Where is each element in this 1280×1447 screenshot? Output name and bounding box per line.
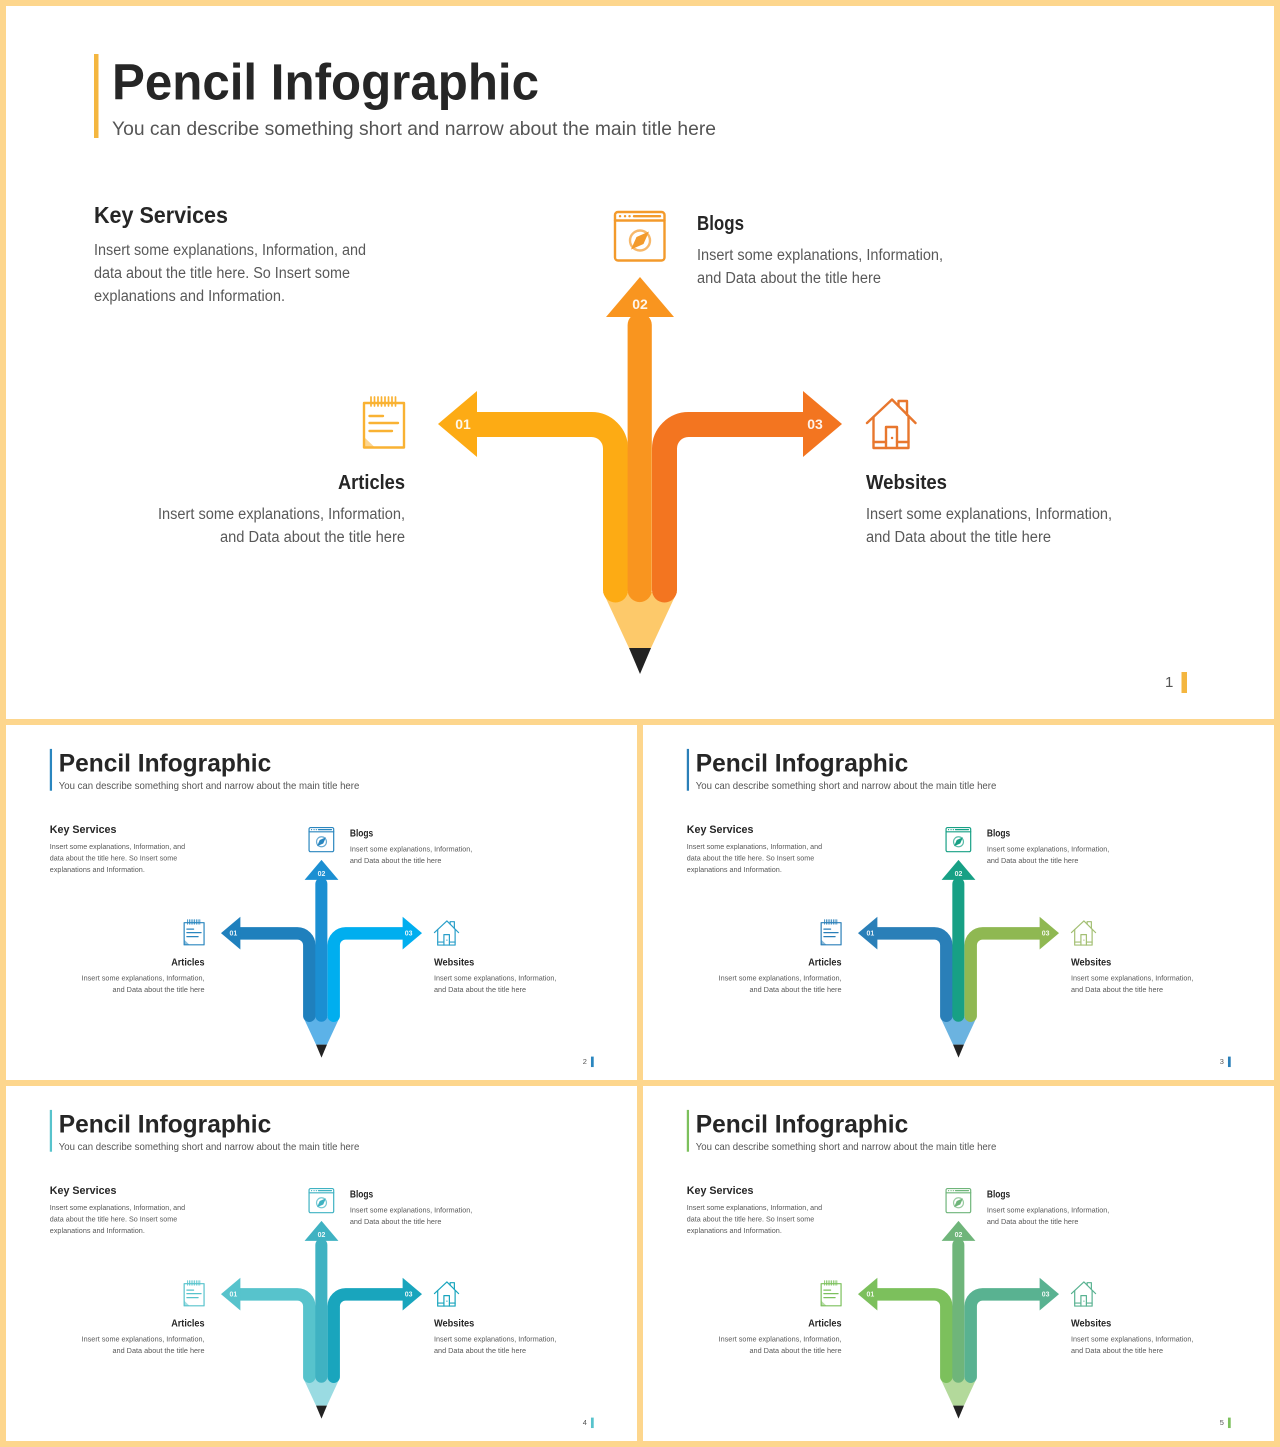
icon: blog browser [309,828,334,852]
text block: blogs: Insert some explanations, Information, [987,844,1109,853]
text block: articles [719,1318,842,1355]
arrow 02 up [942,1221,975,1377]
arrow 01 left: 01 [455,416,471,432]
text block: articles: Insert some explanations, Information, [82,973,205,982]
icon: website house [1071,921,1096,945]
text block: articles: Articles [808,1318,842,1329]
text block: articles: and Data about the title here [112,1346,205,1355]
text block: key services [687,1185,822,1235]
text block: websites [434,1318,556,1355]
text block: articles: and Data about the title here [749,1346,842,1355]
arrow 02 up [305,1221,338,1377]
text block: websites: and Data about the title here [434,1346,526,1355]
subtitle: You can describe something short and narrow about the main title here [696,1142,996,1153]
icon: articles notepad [184,1281,204,1306]
panel: green slide [643,1086,1274,1441]
text block: key services: Insert some explanations, Information, and [94,242,366,259]
text block: articles: Articles [171,957,205,968]
arrow 03 right: 03 [807,416,823,432]
arrow 01 left: 01 [867,931,874,938]
icon: website house [1071,1282,1096,1306]
text block: articles: Insert some explanations, Information, [82,1334,205,1343]
arrow 03 right [971,917,1059,1016]
title: Pencil Infographic [59,1111,271,1139]
arrow 02 up [606,277,674,590]
pencil with three arrows [858,860,1059,1058]
icon: articles notepad [821,1281,841,1306]
arrow 01 left [221,917,309,1016]
panel: blue slide [6,725,637,1080]
page number: 4 [583,1418,587,1427]
page number [1220,1418,1231,1428]
text block: websites [866,471,1112,546]
text block: key services [94,202,366,305]
text block: key services: Insert some explanations, Information, and [687,1203,822,1212]
text block: blogs [987,1190,1109,1226]
pencil with three arrows [221,860,422,1058]
pencil lead [629,648,651,674]
text block: articles [158,471,405,546]
pencil with three arrows [221,1221,422,1419]
icon: articles notepad [364,397,404,448]
text block: articles: Insert some explanations, Information, [158,506,405,523]
page number: 5 [1220,1418,1224,1427]
title accent bar [687,1110,689,1152]
arrow 02 up: 02 [318,871,325,878]
text block: key services: data about the title here. So Insert some [687,853,814,862]
panel: main orange slide [6,6,1274,719]
icon: blog browser [309,1189,334,1213]
subtitle: You can describe something short and narrow about the main title here [112,118,716,140]
arrow 03 right [334,917,422,1016]
text block: blogs: and Data about the title here [987,1217,1078,1226]
text block: articles: and Data about the title here [749,985,842,994]
arrow 02 up [305,860,338,1016]
page number: 3 [1220,1057,1224,1066]
arrow 03 right: 03 [405,931,413,938]
icon: blog browser [946,1189,971,1213]
icon: articles notepad [184,920,204,945]
title: Pencil Infographic [696,1111,908,1139]
text block: articles: Insert some explanations, Information, [719,1334,842,1343]
arrow 02 up: 02 [955,871,962,878]
pencil wood [303,1378,340,1406]
text block: blogs: Insert some explanations, Information, [350,844,472,853]
title: Pencil Infographic [59,750,271,778]
text block: websites: Insert some explanations, Information, [434,1334,556,1343]
text block: websites: Insert some explanations, Information, [1071,1334,1193,1343]
arrow 02 up: 02 [318,1232,325,1239]
icon: articles notepad [821,920,841,945]
text block: articles: and Data about the title here [112,985,205,994]
title: Pencil Infographic [112,54,539,110]
page number [583,1418,594,1428]
text block: key services: explanations and Information. [687,1226,782,1235]
text block: websites: Websites [434,957,475,968]
subtitle: You can describe something short and narrow about the main title here [59,781,359,792]
text block: websites: and Data about the title here [1071,1346,1163,1355]
arrow 03 right [971,1278,1059,1377]
text block: key services: data about the title here. So Insert some [50,853,177,862]
text block: key services: Insert some explanations, Information, and [50,1203,185,1212]
arrow 01 left [438,391,616,590]
text block: key services [50,1185,185,1235]
title accent bar [94,54,98,138]
page number [1165,672,1187,693]
text block: blogs: Blogs [350,829,374,840]
icon: website house [434,921,459,945]
pencil wood [303,1017,340,1045]
text block: blogs: Insert some explanations, Information, [987,1205,1109,1214]
text block: websites [1071,957,1193,994]
text block: key services: Insert some explanations, Information, and [687,842,822,851]
text block: websites: and Data about the title here [1071,985,1163,994]
text block: articles: Articles [808,957,842,968]
text block: blogs: Blogs [987,829,1011,840]
pencil with three arrows [858,1221,1059,1419]
text block: key services: Key Services [687,1185,753,1197]
text block: key services: explanations and Information. [687,865,782,874]
pencil wood [940,1017,977,1045]
arrow 03 right: 03 [1042,931,1050,938]
icon: website house [434,1282,459,1306]
text block: blogs: Insert some explanations, Information, [697,247,943,264]
text block: blogs: Insert some explanations, Information, [350,1205,472,1214]
text block: articles: and Data about the title here [220,529,405,546]
text block: key services: explanations and Information. [94,288,285,305]
text block: websites: Insert some explanations, Information, [1071,973,1193,982]
pencil lead [316,1406,327,1419]
page number [1220,1057,1231,1067]
title accent bar [687,749,689,791]
pencil with three arrows [438,277,842,674]
pencil wood [603,592,677,648]
text block: articles: Articles [171,1318,205,1329]
panel: teal slide [6,1086,637,1441]
text block: websites: Insert some explanations, Information, [434,973,556,982]
text block: websites: Insert some explanations, Information, [866,506,1112,523]
text block: articles [82,1318,205,1355]
text block: websites: and Data about the title here [434,985,526,994]
text block: key services: Key Services [50,1185,116,1197]
text block: blogs [697,212,943,287]
arrow 02 up [942,860,975,1016]
text block: websites [1071,1318,1193,1355]
subtitle: You can describe something short and narrow about the main title here [59,1142,359,1153]
text block: key services: data about the title here. So Insert some [687,1214,814,1223]
arrow 01 left: 01 [867,1292,874,1299]
text block: key services [50,824,185,874]
text block: key services: Key Services [94,202,228,228]
title accent bar [50,1110,52,1152]
icon: website house [867,400,916,448]
text block: websites: Websites [1071,1318,1112,1329]
text block: key services: data about the title here. So Insert some [94,265,350,282]
text block: key services [687,824,822,874]
text block: blogs: Blogs [350,1190,374,1201]
text block: blogs: and Data about the title here [350,1217,441,1226]
pencil wood [940,1378,977,1406]
text block: blogs: Blogs [697,212,744,235]
text block: articles: Insert some explanations, Information, [719,973,842,982]
text block: blogs [350,1190,472,1226]
panel: blue-green slide [643,725,1274,1080]
arrow 03 right: 03 [405,1292,413,1299]
text block: blogs: and Data about the title here [350,856,441,865]
text block: blogs [350,829,472,865]
text block: blogs: and Data about the title here [987,856,1078,865]
page number: 1 [1165,674,1173,691]
arrow 02 up: 02 [632,296,648,312]
pencil lead [316,1045,327,1058]
text block: websites: Websites [866,471,947,494]
pencil lead [953,1045,964,1058]
title accent bar [50,749,52,791]
text block: websites [434,957,556,994]
text block: blogs [987,829,1109,865]
pencil lead [953,1406,964,1419]
text block: blogs: Blogs [987,1190,1011,1201]
text block: key services: Key Services [687,824,753,836]
arrow 03 right [334,1278,422,1377]
arrow 03 right [664,391,842,590]
text block: key services: explanations and Information. [50,865,145,874]
arrow 01 left [858,1278,946,1377]
text block: websites: Websites [1071,957,1112,968]
text block: websites: Websites [434,1318,475,1329]
text block: key services: data about the title here. So Insert some [50,1214,177,1223]
text block: articles [82,957,205,994]
icon: blog browser [615,212,664,260]
arrow 01 left [858,917,946,1016]
arrow 03 right: 03 [1042,1292,1050,1299]
page number: 2 [583,1057,587,1066]
icon: blog browser [946,828,971,852]
text block: key services: explanations and Information. [50,1226,145,1235]
arrow 01 left: 01 [230,1292,237,1299]
text block: articles [719,957,842,994]
text block: key services: Insert some explanations, Information, and [50,842,185,851]
text block: key services: Key Services [50,824,116,836]
arrow 01 left [221,1278,309,1377]
title: Pencil Infographic [696,750,908,778]
text block: websites: and Data about the title here [866,529,1051,546]
text block: blogs: and Data about the title here [697,270,881,287]
page number [583,1057,594,1067]
text block: articles: Articles [338,471,405,494]
arrow 02 up: 02 [955,1232,962,1239]
arrow 01 left: 01 [230,931,237,938]
subtitle: You can describe something short and narrow about the main title here [696,781,996,792]
